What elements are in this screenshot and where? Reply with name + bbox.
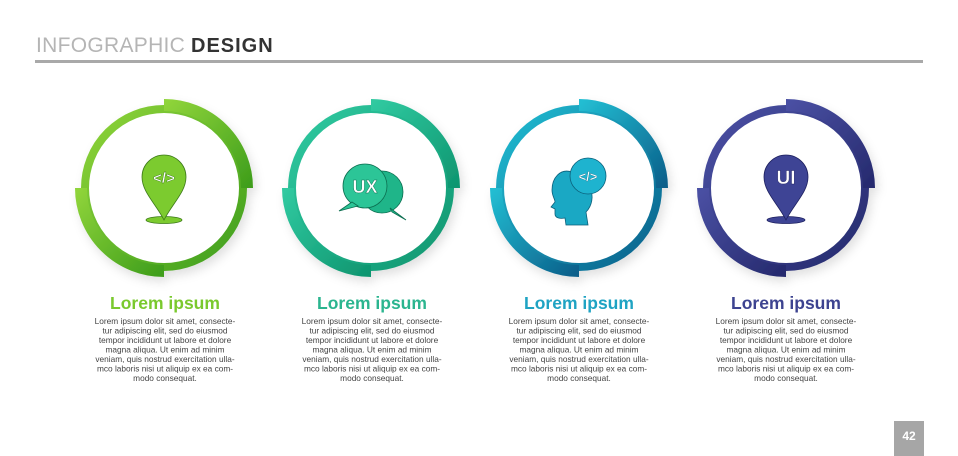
panel: step 2 xyxy=(288,105,454,383)
text 3: tempor incididunt ut labore et dolore xyxy=(513,335,646,345)
text 1: tur adipiscing elit, sed do eiusmod xyxy=(103,326,228,336)
text 1: mco laboris nisi ut aliquip ex ea com- xyxy=(97,364,233,374)
page number: 42 xyxy=(902,429,916,443)
icon: code pin: </> xyxy=(153,170,175,187)
text 3: mco laboris nisi ut aliquip ex ea com- xyxy=(511,364,647,374)
icon: UI pin xyxy=(764,155,808,224)
text 1 xyxy=(95,316,236,383)
text 2: modo consequat. xyxy=(340,373,404,383)
text 2: Lorem ipsum dolor sit amet, consecte- xyxy=(302,316,443,326)
icon: head with code: </> xyxy=(579,169,598,184)
icon: UI pin: UI xyxy=(776,168,796,189)
ring 3 xyxy=(496,105,662,271)
ring 4 xyxy=(703,105,869,271)
text 4 xyxy=(716,316,857,383)
heading 1: Lorem ipsum xyxy=(110,293,220,313)
heading 2: Lorem ipsum xyxy=(317,293,427,313)
title: INFOGRAPHIC xyxy=(36,34,185,57)
icon: UX chat bubbles xyxy=(339,164,406,220)
icon: code pin xyxy=(142,155,186,224)
text 1: tempor incididunt ut labore et dolore xyxy=(99,335,232,345)
text 3 xyxy=(509,316,650,383)
text 2 xyxy=(302,316,443,383)
text 1: Lorem ipsum dolor sit amet, consecte- xyxy=(95,316,236,326)
text 4: modo consequat. xyxy=(754,373,818,383)
text 2: veniam, quis nostrud exercitation ulla- xyxy=(302,354,442,364)
icon: head with code xyxy=(551,158,606,225)
text 2: magna aliqua. Ut enim ad minim xyxy=(313,344,432,354)
text 4: mco laboris nisi ut aliquip ex ea com- xyxy=(718,364,854,374)
text 4: Lorem ipsum dolor sit amet, consecte- xyxy=(716,316,857,326)
text 4: tempor incididunt ut labore et dolore xyxy=(720,335,853,345)
title: DESIGN xyxy=(191,35,274,57)
text 3: tur adipiscing elit, sed do eiusmod xyxy=(517,326,642,336)
text 1: magna aliqua. Ut enim ad minim xyxy=(106,344,225,354)
ring 2 xyxy=(288,105,454,271)
ring 1 xyxy=(81,105,247,271)
panel: step 1 xyxy=(81,105,247,383)
panel: step 4 xyxy=(703,105,869,383)
text 4: veniam, quis nostrud exercitation ulla- xyxy=(716,354,856,364)
title xyxy=(36,34,274,57)
panel: step 3 xyxy=(496,105,662,383)
text 4: magna aliqua. Ut enim ad minim xyxy=(727,344,846,354)
text 3: Lorem ipsum dolor sit amet, consecte- xyxy=(509,316,650,326)
text 1: modo consequat. xyxy=(133,373,197,383)
text 3: modo consequat. xyxy=(547,373,611,383)
icon: UX chat bubbles: UX xyxy=(352,177,378,197)
text 2: tempor incididunt ut labore et dolore xyxy=(306,335,439,345)
page number xyxy=(894,421,924,456)
text 3: magna aliqua. Ut enim ad minim xyxy=(520,344,639,354)
text 1: veniam, quis nostrud exercitation ulla- xyxy=(95,354,235,364)
heading 3: Lorem ipsum xyxy=(524,293,634,313)
text 2: tur adipiscing elit, sed do eiusmod xyxy=(310,326,435,336)
heading 4: Lorem ipsum xyxy=(731,293,841,313)
text 3: veniam, quis nostrud exercitation ulla- xyxy=(509,354,649,364)
text 2: mco laboris nisi ut aliquip ex ea com- xyxy=(304,364,440,374)
text 4: tur adipiscing elit, sed do eiusmod xyxy=(724,326,849,336)
